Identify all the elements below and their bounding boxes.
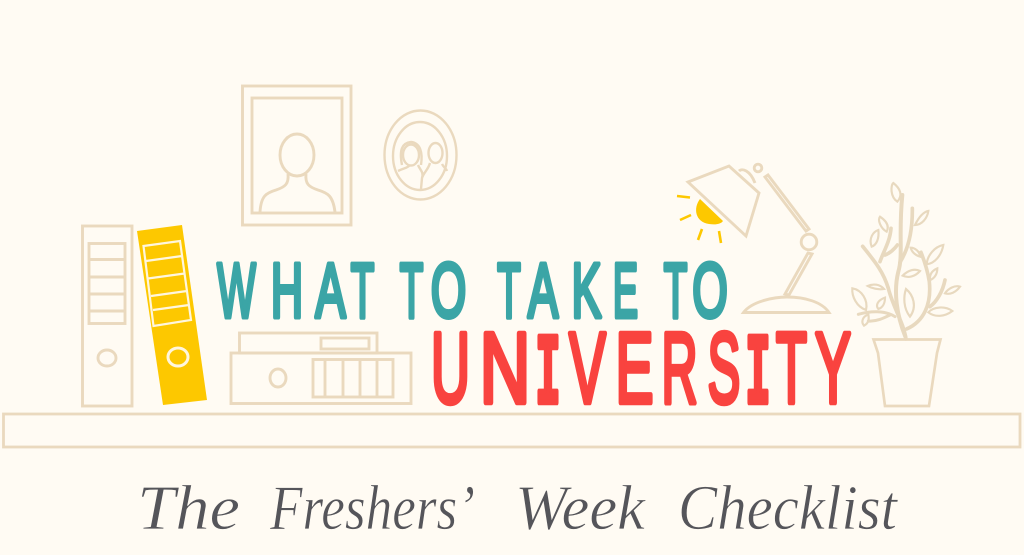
icon: plant pot	[874, 340, 940, 406]
title: university: I	[535, 320, 561, 434]
subtitle: The	[137, 472, 240, 543]
title: what to take to: E	[613, 247, 638, 334]
title: what to take to: H	[271, 248, 303, 334]
title: what to take to: W	[217, 248, 256, 334]
subtitle	[137, 472, 899, 543]
icon: oval family portrait	[384, 110, 456, 200]
icon: potted plant	[852, 183, 960, 339]
title: university: S	[708, 312, 740, 424]
title: university: N	[480, 313, 530, 425]
title: university: U	[431, 313, 470, 425]
title: what to take to: A	[528, 249, 559, 334]
title: university: R	[661, 311, 698, 424]
title: university: V	[569, 313, 606, 425]
title: what to take to: K	[572, 248, 601, 334]
title: what to take to: O	[692, 249, 728, 334]
icon: stacked box files	[231, 333, 411, 404]
icon: large portrait frame	[242, 86, 351, 225]
title: university: T	[776, 312, 807, 424]
icon: desk lamp	[688, 164, 829, 312]
title: what to take to: T	[497, 247, 521, 333]
title: what to take to: T	[351, 247, 374, 333]
subtitle: Week	[515, 472, 647, 543]
icon: white binder	[82, 226, 132, 406]
title: what to take to: T	[664, 247, 687, 333]
icon: yellow binder	[137, 225, 207, 405]
title: university: I	[745, 320, 771, 434]
subtitle: Checklist	[678, 472, 899, 543]
icon: lamp light	[677, 196, 723, 243]
subtitle: Freshers’	[269, 472, 475, 543]
title: what to take to	[217, 247, 728, 334]
title: university: Y	[815, 313, 851, 425]
title: university: E	[615, 313, 654, 425]
title: what to take to: T	[400, 247, 423, 333]
title: university	[431, 311, 851, 434]
shelf	[4, 414, 1020, 447]
title: what to take to: A	[315, 249, 346, 334]
title: what to take to: O	[431, 249, 466, 334]
